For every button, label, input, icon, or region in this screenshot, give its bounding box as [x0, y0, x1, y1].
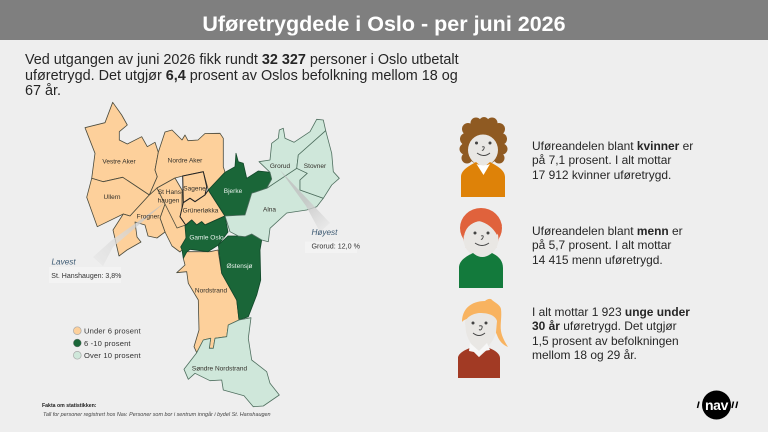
legend: Over 10 prosent	[84, 351, 141, 360]
peach districts	[85, 102, 239, 353]
district labels: Sagene	[183, 186, 206, 192]
callout: lowest: Lavest	[52, 258, 76, 266]
district labels: Vestre Aker	[102, 158, 136, 166]
text: young: mellom 18 og 29 år.	[532, 348, 637, 362]
text: men	[532, 224, 683, 267]
title banner: Uføretrygdede i Oslo - per juni 2026	[202, 12, 566, 36]
district labels	[102, 158, 327, 372]
legend: 6 -10 prosent	[84, 339, 131, 348]
callout: highest	[305, 228, 361, 253]
pointer: highest	[280, 170, 330, 232]
district labels on dark green: Gamle Oslo	[189, 234, 224, 242]
intro text: uføretrygd. Det utgjør 6,4 prosent av Oslos befolkning mellom 18 og	[25, 68, 458, 84]
text: men: Uføreandelen blant menn er	[532, 224, 683, 238]
district labels: Stovner	[304, 163, 327, 170]
text: young	[532, 305, 690, 362]
district labels: Alna	[263, 206, 276, 214]
district labels on dark green: Bjerke	[224, 188, 243, 195]
district labels: Nordstrand	[195, 288, 227, 294]
text: women	[532, 139, 694, 182]
text: men: på 5,7 prosent. I alt mottar	[532, 238, 671, 252]
district labels: haugen	[158, 198, 180, 204]
footnote	[42, 403, 271, 418]
text: men: 14 415 menn uføretrygd.	[532, 253, 663, 267]
legend	[73, 326, 141, 360]
logo: Nav	[698, 390, 738, 420]
light green districts	[184, 119, 339, 407]
district labels: Frogner	[137, 214, 160, 220]
callout: highest: Høyest	[312, 228, 338, 237]
icon: man with red hair	[459, 208, 503, 288]
district labels: Ullern	[104, 194, 121, 201]
district labels: Grorud	[270, 163, 290, 170]
district labels: Grünerløkka	[183, 208, 219, 214]
text: women: Uføreandelen blant kvinner er	[532, 139, 693, 153]
pointer: lowest	[93, 202, 166, 266]
icon: young person with ponytail	[458, 299, 508, 378]
district labels: St Hans-	[158, 189, 183, 196]
text: young: I alt mottar 1 923 unge under	[532, 305, 690, 319]
logo: Nav: nav	[705, 397, 729, 413]
intro text: 67 år.	[25, 83, 61, 99]
callout: highest: Grorud: 12,0 %	[312, 242, 361, 250]
district labels: Søndre Nordstrand	[192, 366, 248, 372]
footnote: Fakta om statistikken:	[42, 403, 97, 409]
legend: Under 6 prosent	[84, 326, 141, 335]
dark green districts	[181, 153, 272, 320]
text: women: 17 912 kvinner uføretrygd.	[532, 168, 671, 182]
text: women: på 7,1 prosent. I alt mottar	[532, 153, 671, 167]
callout: lowest	[49, 258, 121, 283]
icon: woman with curly hair	[460, 117, 508, 197]
text: young: 1,5 prosent av befolkningen	[532, 334, 679, 348]
intro text: Ved utgangen av juni 2026 fikk rundt 32 327 personer i Oslo utbetalt	[25, 52, 459, 68]
district labels on dark green	[189, 188, 253, 270]
text: young: 30 år uføretrygd. Det utgjør	[532, 319, 677, 333]
callout: lowest: St. Hanshaugen: 3,8%	[51, 273, 121, 280]
intro text	[25, 52, 459, 99]
footnote: Tall for personer registrert hos Nav. Personer som bor i sentrum inngår i bydel St. Hanshaugen	[43, 411, 271, 418]
district labels: Nordre Aker	[168, 158, 203, 164]
title banner	[0, 0, 768, 40]
district labels on dark green: Østensjø	[226, 263, 253, 270]
